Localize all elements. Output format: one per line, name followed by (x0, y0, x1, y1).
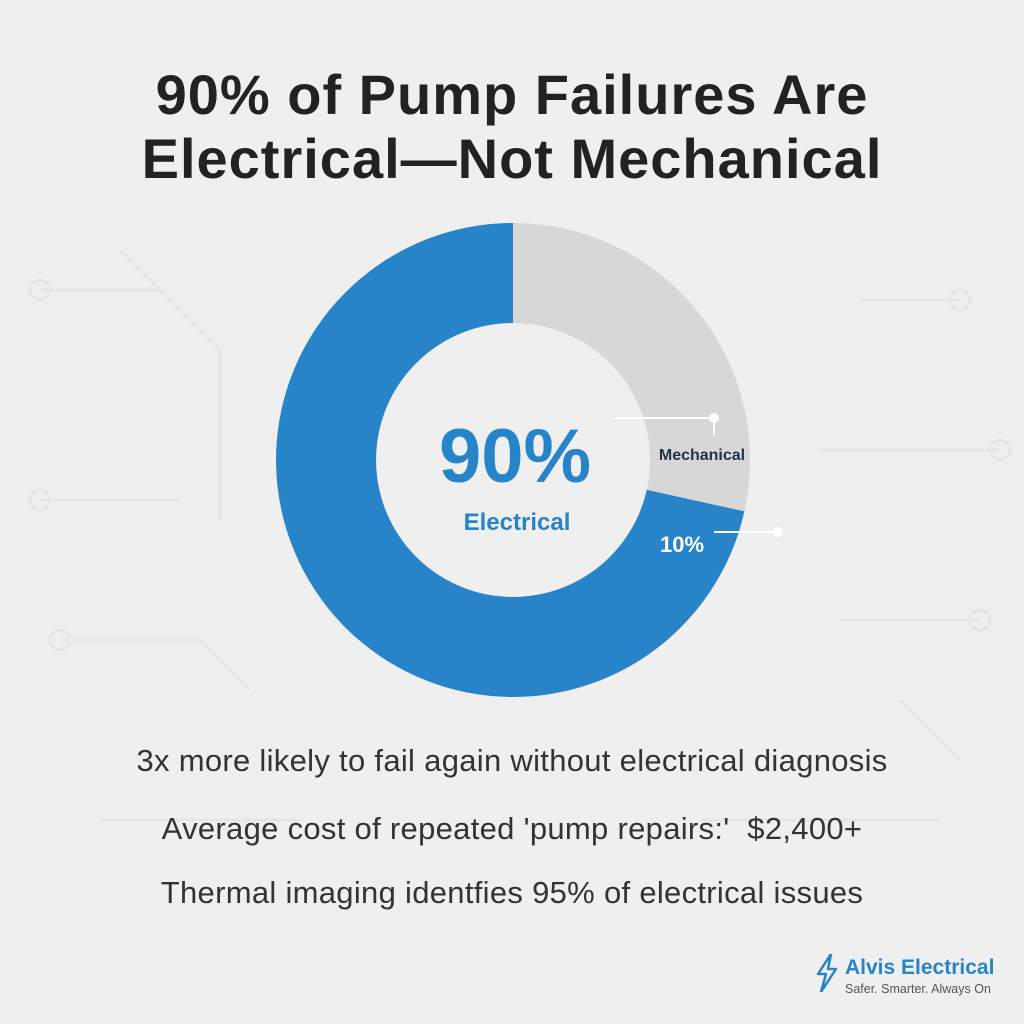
slice: electrical (276, 223, 744, 697)
icon: lightning bolt (816, 954, 838, 992)
logo: Alvis Electrical (845, 956, 994, 979)
stat 3: Thermal imaging identfies 95% of electrical issues (161, 875, 863, 910)
center label: Electrical (464, 509, 570, 536)
callout: mechanical: Mechanical (659, 447, 745, 464)
title: Electrical—Not Mechanical (142, 127, 882, 190)
center label (439, 414, 591, 536)
title: 90% of Pump Failures Are (156, 63, 868, 126)
title (142, 63, 882, 190)
stat 1: 3x more likely to fail again without electrical diagnosis (136, 743, 888, 778)
logo: Safer. Smarter. Always On (845, 982, 991, 996)
logo (816, 954, 994, 996)
slice: mechanical (513, 223, 750, 511)
callout: 10% (660, 527, 783, 557)
callout: mechanical (614, 413, 745, 464)
center label: 90% (439, 414, 591, 499)
callout: 10%: 10% (660, 532, 704, 557)
stat 2: Average cost of repeated 'pump repairs:' $2,400+ (162, 811, 862, 846)
